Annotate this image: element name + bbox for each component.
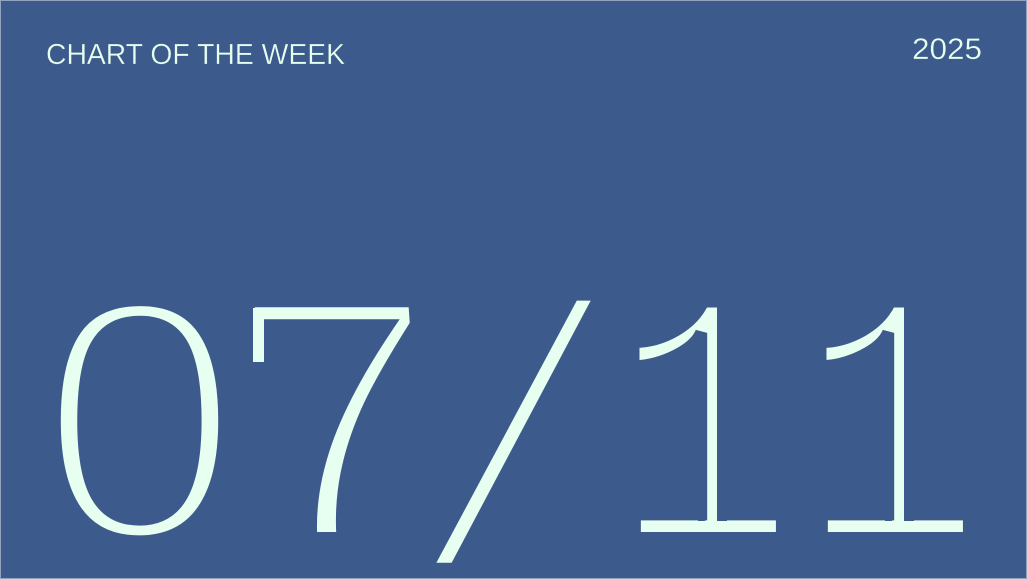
large date: 07/11: [39, 220, 984, 579]
heading: chart of the week: CHART OF THE WEEK: [46, 39, 346, 71]
year label: 2025: [912, 33, 982, 66]
